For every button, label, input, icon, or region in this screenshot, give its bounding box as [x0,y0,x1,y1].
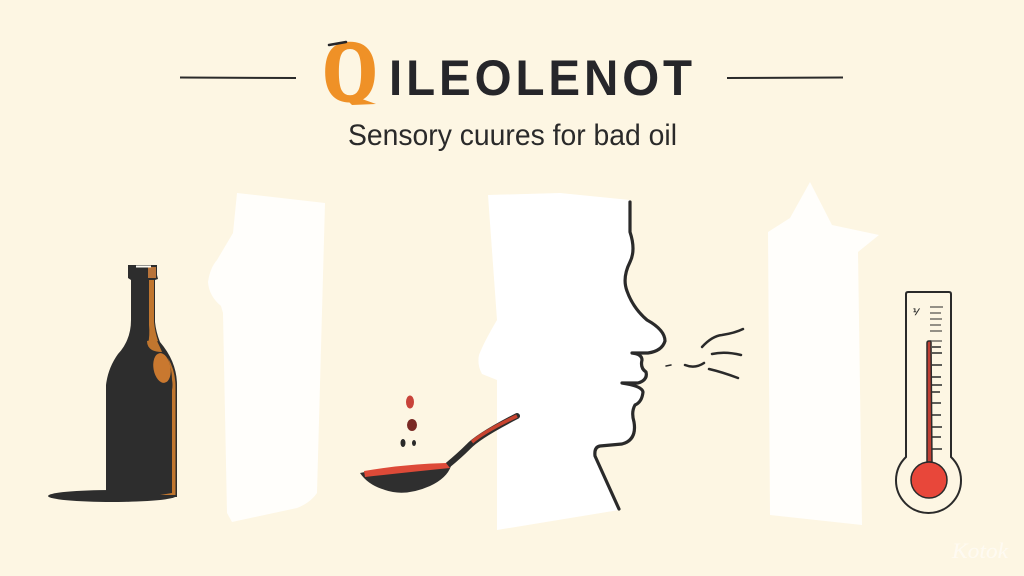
scent wisps [666,329,743,378]
orange O tail [345,98,376,105]
left title rule [180,76,296,79]
thermometer tube [927,341,932,462]
white panel: face [478,193,665,530]
icon: oil bottle [48,265,177,502]
bottle cap opening [136,266,151,268]
icon: thermometer [896,292,961,513]
thermometer scale mark: ⅟ [913,307,921,317]
white panel: thermometer [768,182,879,525]
falling drops [400,396,417,447]
thermometer outline [896,292,961,513]
black tick on O [329,42,346,45]
spoon handle [448,416,517,465]
thermometer ticks [930,307,943,449]
title remaining letters: ILEOLENOT [389,51,692,106]
red oil [364,463,450,477]
icon: spoon with red oil [360,396,517,493]
thermometer bulb [911,462,947,498]
bottle cap [128,265,158,280]
bottle cap amber band [148,267,156,278]
title [323,23,692,119]
face profile line [595,202,665,509]
spoon handle red inlay [472,416,517,442]
bottle shadow [48,490,176,502]
subtitle: Sensory cuures for bad oil [348,119,677,152]
spoon bowl [360,466,451,493]
title first letter: orange O: O [323,23,377,119]
right title rule [727,76,843,79]
bottle shoulder amber [147,339,162,352]
bottle highlight [151,352,173,384]
watermark: Kotok [951,538,1009,563]
bottle amber neck [148,280,158,345]
white panel: bottle [208,193,325,522]
bottle silhouette [106,280,177,497]
bottle amber side [160,358,176,495]
